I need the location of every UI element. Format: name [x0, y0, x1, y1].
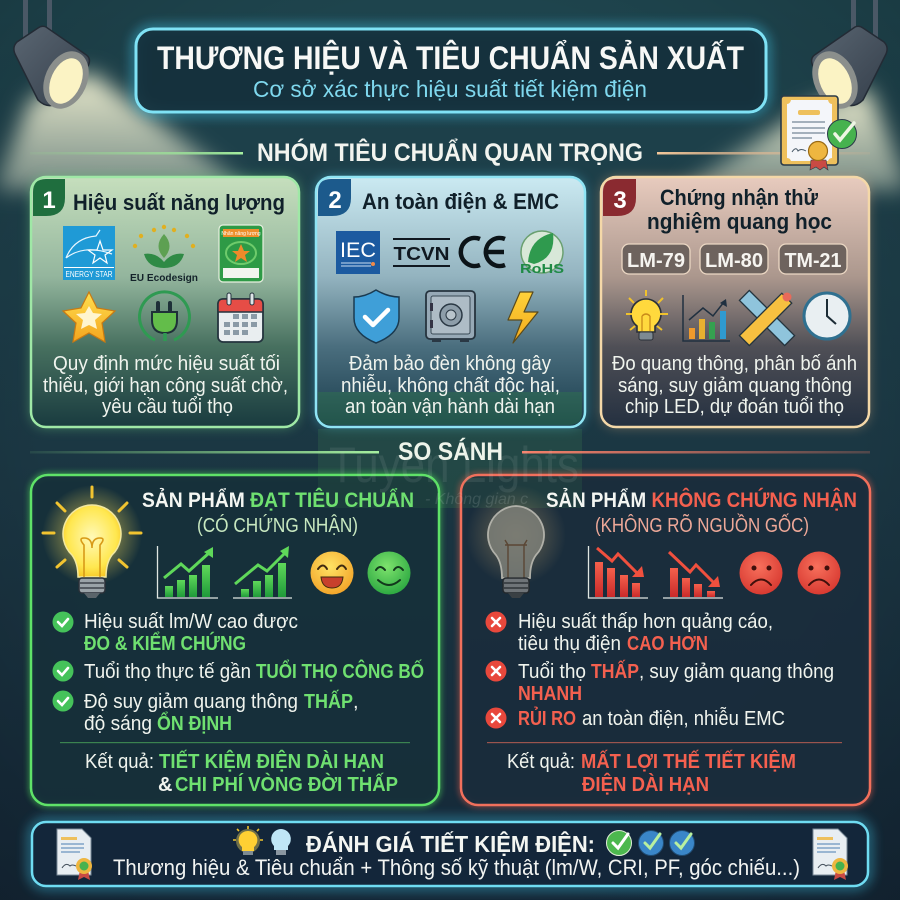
description: an toàn vận hành dài hạn	[345, 396, 555, 418]
list item 1: Hiệu suất lm/W cao được	[84, 611, 298, 633]
description: Quy định mức hiệu suất tối	[53, 353, 280, 375]
icon: clock	[804, 293, 850, 339]
list item 3: an toàn điện, nhiễu EMC	[582, 707, 785, 730]
logo: Energy Star	[63, 226, 115, 280]
number badge 1	[33, 179, 65, 216]
title: THƯƠNG HIỆU VÀ TIÊU CHUẨN SẢN XUẤT	[157, 40, 744, 76]
icon: calendar	[218, 293, 263, 342]
heading: Chứng nhận thử	[660, 185, 818, 210]
panel: energy efficiency	[31, 177, 299, 427]
result: &	[158, 774, 172, 796]
description: thiểu, giới hạn công suất chờ,	[43, 375, 288, 397]
panel: uncertified products	[461, 475, 870, 805]
icon: blue bulb	[271, 829, 291, 855]
icon: glowing bulb	[42, 485, 142, 598]
number badge 2: 2	[328, 187, 342, 214]
number badge 2	[318, 179, 351, 216]
list item 3: ,	[353, 691, 359, 713]
number badge 3	[603, 179, 636, 216]
section heading: standards: NHÓM TIÊU CHUẨN QUAN TRỌNG	[257, 137, 643, 167]
panel: optical test certification	[601, 177, 869, 427]
result: MẤT LỢI THẾ TIẾT KIỆM	[581, 749, 796, 773]
icon: star	[63, 292, 115, 342]
logo: TCVN: TCVN	[394, 244, 450, 264]
logo: IEC	[336, 231, 380, 274]
list item 1: CAO HƠN	[627, 633, 708, 655]
list item 2	[52, 659, 424, 683]
icon: power plug	[139, 292, 190, 341]
logo: IEC: IEC	[340, 239, 376, 262]
list item 1: tiêu thụ điện	[518, 633, 621, 655]
heading: Hiệu suất năng lượng	[73, 190, 285, 215]
icon: ruler and pencil	[739, 290, 795, 346]
icon: safe	[426, 291, 475, 342]
logo: Energy Star: ENERGY STAR	[66, 269, 112, 279]
heading: SẢN PHẨM KHÔNG CHỨNG NHẬN	[546, 488, 857, 512]
description: yêu cầu tuổi thọ	[102, 396, 233, 418]
watermark text: - Không gian c	[425, 491, 528, 508]
list item 2: Tuổi thọ	[518, 661, 586, 683]
logo: CE	[461, 238, 505, 266]
list item 2	[486, 660, 834, 705]
list item 1	[52, 611, 298, 655]
pill: TM-21	[779, 244, 847, 274]
icon: certificate with check	[781, 96, 856, 170]
icon: blue check 2	[670, 830, 694, 856]
watermark band	[318, 429, 582, 508]
heading: An toàn điện & EMC	[362, 189, 559, 214]
logo: EU Ecodesign	[130, 225, 198, 284]
list item 2: NHANH	[518, 683, 582, 705]
result: Kết quả:	[507, 751, 575, 773]
logo: Vietnam energy label	[219, 225, 263, 282]
panel: savings assessment footer	[32, 822, 868, 886]
pill: TM-21: TM-21	[784, 250, 842, 272]
list item 1: ĐO & KIỂM CHỨNG	[84, 631, 246, 655]
number badge 1: 1	[42, 187, 56, 214]
description	[612, 353, 857, 418]
description: sáng, suy giảm quang thông	[618, 375, 852, 397]
panel: certified products	[31, 475, 439, 805]
list item 2: THẤP	[591, 660, 639, 683]
logo: Vietnam energy label: Nhãn năng lượng	[221, 231, 261, 237]
result: ĐIỆN DÀI HẠN	[582, 772, 709, 796]
chart: falling 1	[588, 546, 648, 598]
list item 3: Độ suy giảm quang thông	[84, 691, 298, 713]
icon: sad face 2	[798, 552, 840, 594]
icon: certificate left	[57, 829, 92, 880]
heading: SẢN PHẨM ĐẠT TIÊU CHUẨN	[142, 488, 414, 512]
subheading: (KHÔNG RÕ NGUỒN GỐC)	[595, 513, 809, 537]
logo: EU Ecodesign: EU Ecodesign	[130, 272, 198, 284]
description	[43, 353, 288, 418]
logo: RoHS	[520, 231, 564, 276]
icon: yellow bulb	[233, 826, 263, 855]
icon: happy face yellow	[310, 552, 354, 594]
icon: rising chart	[683, 295, 730, 341]
list item 1	[486, 611, 773, 655]
subheading: (CÓ CHỨNG NHẬN)	[197, 514, 358, 537]
heading: nghiệm quang học	[647, 209, 832, 234]
list item 3: ỔN ĐỊNH	[157, 711, 232, 735]
logo: TCVN	[393, 238, 450, 267]
list item 3	[52, 690, 359, 735]
subtitle: Cơ sở xác thực hiệu suất tiết kiệm điện	[253, 76, 647, 102]
icon: light bulb	[626, 290, 668, 340]
chart: rising 2	[233, 546, 292, 598]
list item 3: THẤP	[304, 690, 353, 713]
result	[85, 749, 398, 796]
description	[341, 353, 560, 418]
description: nhiễu, không chất độc hại,	[341, 374, 560, 397]
chart: falling 2	[663, 552, 723, 598]
chart: rising 1	[158, 546, 218, 598]
watermark text: Tuyen Lights	[329, 437, 579, 493]
list item 2: TUỔI THỌ CÔNG BỐ	[256, 659, 424, 683]
list item 2: , suy giảm quang thông	[639, 661, 834, 683]
icon: blue check 1	[638, 830, 664, 856]
list item 3	[486, 706, 785, 730]
icon: green check	[606, 830, 632, 856]
pill: LM-80: LM-80	[705, 250, 763, 272]
pill: LM-79	[622, 244, 690, 274]
list item 2: Tuổi thọ thực tế gần	[84, 661, 251, 683]
result: Kết quả:	[85, 751, 154, 773]
icon: lightning bolt	[508, 292, 538, 343]
result: TIẾT KIỆM ĐIỆN DÀI HẠN	[159, 749, 384, 773]
icon: happy face green	[368, 552, 410, 594]
result	[507, 749, 796, 796]
description: Đo quang thông, phân bố ánh	[612, 353, 857, 375]
heading	[647, 185, 832, 234]
list item 3: độ sáng	[84, 713, 152, 735]
description: chip LED, dự đoán tuổi thọ	[625, 396, 844, 418]
icon: shield	[354, 290, 399, 343]
pill: LM-79: LM-79	[627, 250, 685, 272]
spotlight: right	[680, 0, 900, 190]
footer heading: ĐÁNH GIÁ TIẾT KIỆM ĐIỆN:	[306, 830, 595, 857]
pill: LM-80	[700, 244, 768, 274]
header panel	[136, 29, 766, 112]
list item 1: Hiệu suất thấp hơn quảng cáo,	[518, 611, 773, 633]
description: Đảm bảo đèn không gây	[349, 353, 551, 375]
icon: certificate right	[813, 829, 848, 880]
section heading: comparison: SO SÁNH	[398, 437, 503, 466]
panel: electrical safety and EMC	[316, 177, 585, 427]
spotlight: left	[0, 0, 250, 190]
logo: RoHS: RoHS	[520, 261, 564, 276]
icon: sad face 1	[740, 552, 782, 594]
number badge 3: 3	[613, 187, 627, 214]
icon: dim bulb	[466, 485, 566, 598]
result: CHI PHÍ VÒNG ĐỜI THẤP	[175, 772, 398, 796]
footer text: Thương hiệu & Tiêu chuẩn + Thông số kỹ thuật (lm/W, CRI, PF, góc chiếu...)	[113, 855, 800, 880]
list item 3: RỦI RO	[518, 706, 576, 730]
